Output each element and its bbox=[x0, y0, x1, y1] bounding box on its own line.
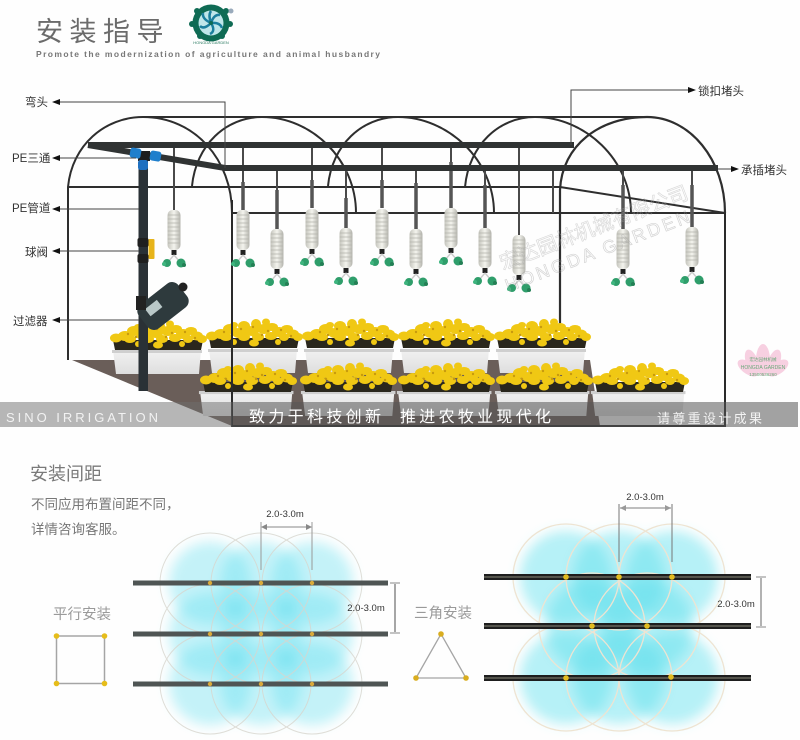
icon: triangle layout bbox=[413, 631, 469, 681]
text block: spacing note: 详情咨询客服。 bbox=[31, 521, 126, 537]
triangular water coverage bbox=[520, 531, 718, 724]
triangular horizontal dimension bbox=[619, 492, 672, 562]
planters: front row bbox=[199, 362, 689, 416]
parallel pipes bbox=[133, 580, 388, 686]
parallel horizontal dimension bbox=[261, 509, 312, 570]
triangular vertical dimension bbox=[717, 577, 766, 627]
ball valve bbox=[138, 238, 154, 263]
title: 安装指导 bbox=[36, 17, 170, 47]
parallel vertical dimension: 2.0-3.0m bbox=[347, 603, 385, 614]
heading: 安装间距: 安装间距 bbox=[30, 464, 102, 484]
callout: 承插堵头 bbox=[718, 163, 787, 177]
triangular vertical dimension: 2.0-3.0m bbox=[717, 599, 755, 610]
callout: 承插堵头: 承插堵头 bbox=[741, 163, 787, 177]
callout: 过滤器 bbox=[13, 315, 139, 328]
logo: HONGDA GARDEN bbox=[193, 40, 229, 45]
callout: 弯头 bbox=[25, 95, 225, 168]
label: 平行安装: 平行安装 bbox=[53, 606, 111, 623]
front frame bbox=[232, 200, 725, 426]
callout: PE管道: PE管道 bbox=[12, 201, 51, 215]
parallel nodes bbox=[208, 581, 314, 686]
subtitle: Promote the modernization of agriculture and animal husbandry bbox=[36, 49, 380, 59]
callout: 球阀 bbox=[25, 245, 139, 259]
callout: PE三通: PE三通 bbox=[12, 152, 51, 165]
slogan band: SINO IRRIGATION bbox=[6, 410, 158, 425]
slogan band: 致力于科技创新 bbox=[249, 408, 381, 426]
triangular pipes bbox=[484, 574, 751, 681]
watermark: HONGDA GARDEN bbox=[502, 206, 695, 296]
parallel circles bbox=[160, 533, 362, 734]
PE tee bbox=[129, 147, 162, 170]
callout: 锁扣堵头: 锁扣堵头 bbox=[698, 84, 744, 98]
lotus logo: HONGDA GARDEN bbox=[741, 365, 786, 371]
parallel water coverage bbox=[169, 542, 353, 725]
planters: back row bbox=[110, 318, 591, 374]
lotus logo: 13500536260 bbox=[749, 372, 777, 377]
label: 三角安装: 三角安装 bbox=[414, 605, 472, 622]
parallel vertical dimension bbox=[347, 583, 400, 633]
lotus logo bbox=[735, 344, 791, 380]
parallel horizontal dimension: 2.0-3.0m bbox=[266, 509, 304, 520]
slogan band: 请尊重设计成果 bbox=[657, 411, 762, 426]
diagram: triangular installation bbox=[484, 492, 766, 731]
text block: spacing note: 不同应用布置间距不同， bbox=[31, 496, 180, 512]
triangular horizontal dimension: 2.0-3.0m bbox=[626, 492, 664, 503]
logo bbox=[189, 4, 234, 45]
callout: 球阀: 球阀 bbox=[25, 245, 48, 259]
filter bbox=[134, 279, 192, 333]
main PE pipes bbox=[88, 145, 718, 168]
greenhouse back structure bbox=[68, 117, 725, 360]
callout: PE三通 bbox=[12, 152, 136, 165]
triangular circles bbox=[513, 524, 725, 731]
watermark: 宏达园林机械有限公司 bbox=[497, 182, 692, 275]
diagram: parallel installation bbox=[133, 509, 400, 734]
slogan band bbox=[0, 402, 798, 427]
icon: square layout bbox=[54, 633, 107, 686]
callout: PE管道 bbox=[12, 201, 139, 215]
slogan band: 推进农牧业现代化 bbox=[400, 408, 551, 426]
callout: 过滤器: 过滤器 bbox=[13, 315, 48, 328]
callout: 锁扣堵头 bbox=[571, 84, 744, 145]
drop hangers and emitters bbox=[162, 145, 704, 292]
vertical PE pipe bbox=[138, 160, 148, 391]
greenhouse ground bbox=[72, 360, 600, 426]
text block: spacing note bbox=[31, 496, 180, 537]
lotus logo: 宏达园林机械 bbox=[750, 356, 777, 363]
triangular nodes bbox=[563, 574, 675, 681]
callout: 弯头: 弯头 bbox=[25, 95, 48, 109]
